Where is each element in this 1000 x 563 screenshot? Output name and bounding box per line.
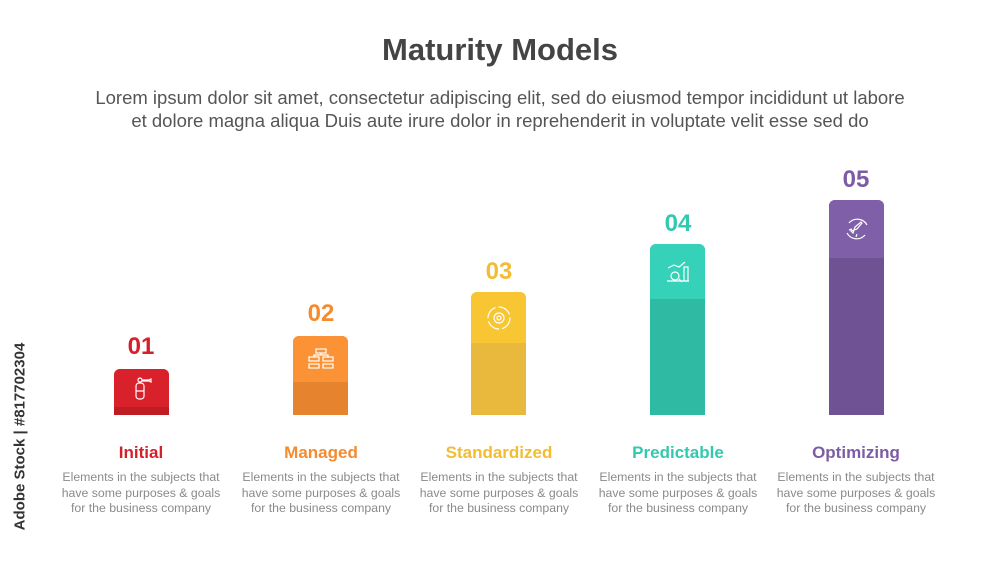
description (62, 470, 220, 515)
subtitle: et dolore magna aliqua Duis aute irure dolor in reprehenderit in voluptate velit esse sed do (131, 110, 869, 131)
bar 5 (829, 200, 884, 415)
description: have some purposes & goals (420, 486, 578, 500)
bar 1 (114, 369, 169, 415)
description: have some purposes & goals (777, 486, 935, 500)
description: have some purposes & goals (62, 486, 220, 500)
number 04: 04 (665, 210, 691, 237)
step 1 (62, 333, 220, 515)
title: Maturity Models (382, 32, 618, 67)
label Initial: Initial (119, 443, 163, 462)
bar 3 (471, 292, 526, 415)
label Managed: Managed (284, 443, 358, 462)
bar 2 (293, 336, 348, 415)
description: for the business company (786, 501, 926, 515)
description (420, 470, 578, 515)
bar 4 (650, 244, 705, 415)
description (777, 470, 935, 515)
label Standardized: Standardized (446, 443, 552, 462)
number 05: 05 (843, 166, 869, 193)
step 2 (242, 300, 400, 515)
description: Elements in the subjects that (599, 470, 757, 484)
step 3 (420, 258, 578, 515)
number 03: 03 (486, 258, 512, 285)
step 5 (777, 166, 935, 515)
description: have some purposes & goals (599, 486, 757, 500)
watermark side text: Adobe Stock | #817702304 (12, 343, 28, 530)
number 01: 01 (128, 333, 154, 360)
step 4 (599, 210, 757, 515)
description: Elements in the subjects that (420, 470, 578, 484)
description: for the business company (251, 501, 391, 515)
description: Elements in the subjects that (242, 470, 400, 484)
number 02: 02 (308, 300, 334, 327)
description: for the business company (429, 501, 569, 515)
description (599, 470, 757, 515)
subtitle (95, 87, 905, 131)
description: for the business company (71, 501, 211, 515)
description (242, 470, 400, 515)
label Optimizing: Optimizing (812, 443, 900, 462)
description: have some purposes & goals (242, 486, 400, 500)
subtitle: Lorem ipsum dolor sit amet, consectetur adipiscing elit, sed do eiusmod tempor incididunt ut labore (95, 87, 905, 108)
description: Elements in the subjects that (62, 470, 220, 484)
description: for the business company (608, 501, 748, 515)
label Predictable: Predictable (632, 443, 724, 462)
description: Elements in the subjects that (777, 470, 935, 484)
